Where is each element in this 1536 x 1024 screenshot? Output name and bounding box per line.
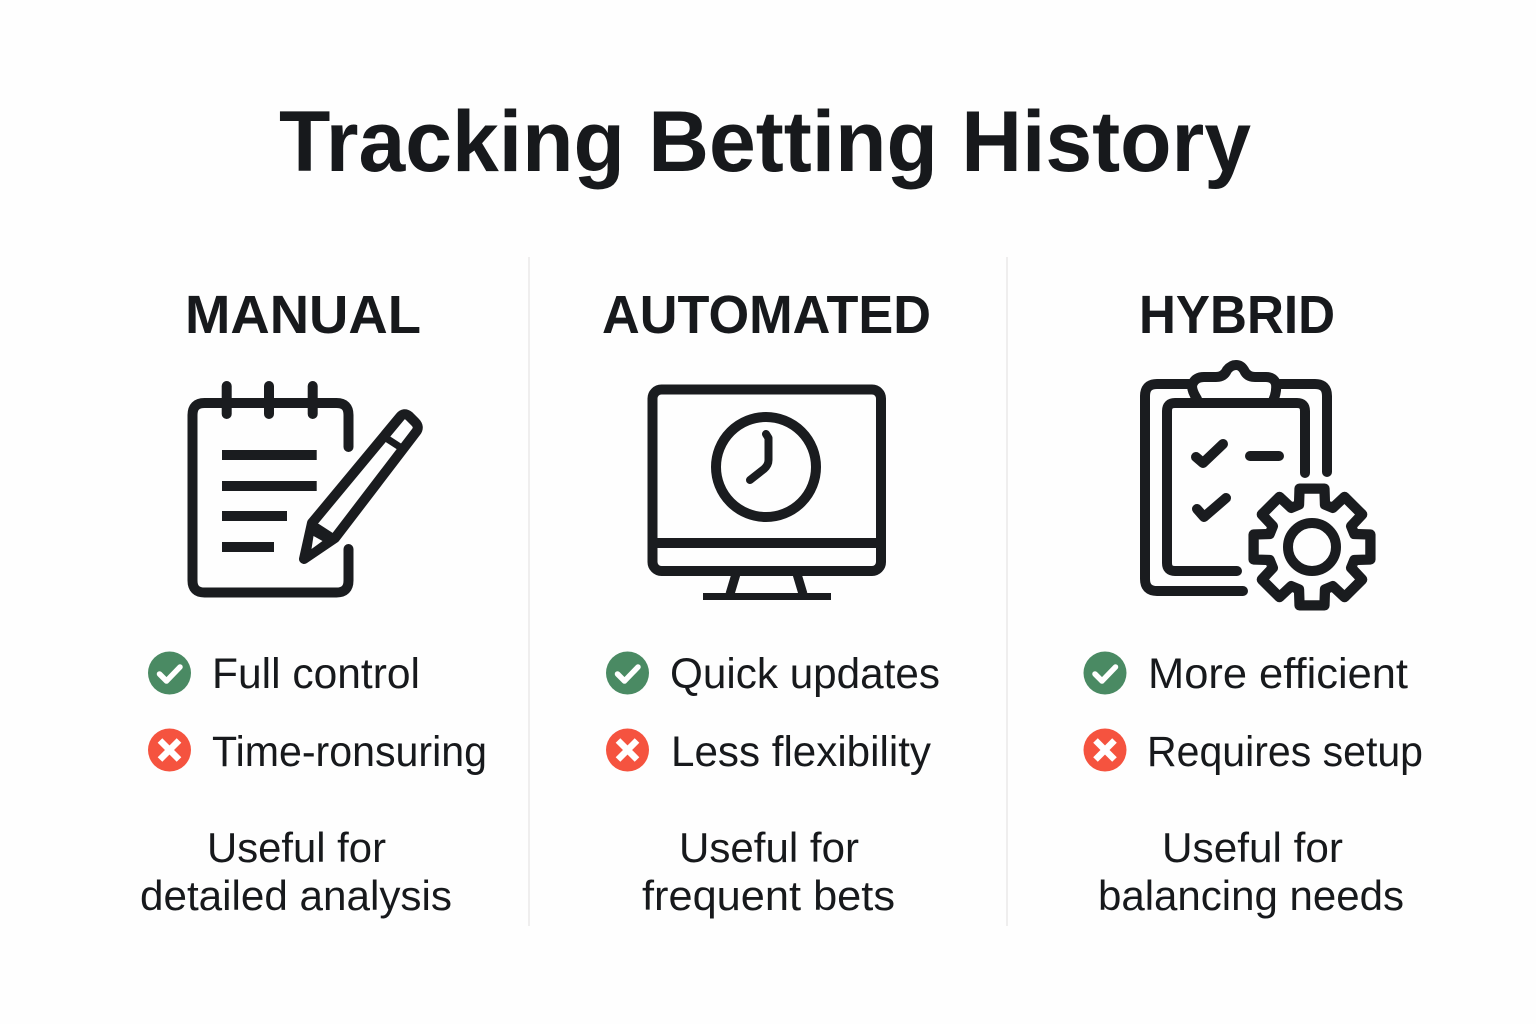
use case: hybrid: Useful for	[1162, 824, 1343, 871]
title: Tracking Betting History	[279, 94, 1251, 190]
con: time-ronsuring: Time-ronsuring	[212, 729, 487, 776]
pro: more efficient: More efficient	[1148, 651, 1408, 698]
heading: hybrid: HYBRID	[1139, 286, 1335, 345]
pro: quick updates: Quick updates	[670, 651, 940, 698]
con: less flexibility: Less flexibility	[671, 729, 932, 776]
pro: full control: Full control	[212, 651, 420, 698]
use case: hybrid	[1098, 824, 1404, 919]
use case: automated	[642, 824, 895, 919]
use case: hybrid: balancing needs	[1098, 872, 1404, 919]
use case: manual: Useful for	[207, 824, 386, 871]
panel: manual	[140, 286, 487, 919]
icon: clipboard with gear	[1145, 365, 1370, 605]
use case: automated: frequent bets	[642, 872, 895, 919]
icon: monitor with clock	[652, 390, 881, 596]
icon: notepad and pencil	[192, 386, 418, 592]
panel: hybrid	[1084, 286, 1423, 919]
panel: automated	[602, 286, 940, 919]
use case: automated: Useful for	[679, 824, 859, 871]
use case: manual: detailed analysis	[140, 872, 452, 919]
heading: automated: AUTOMATED	[602, 286, 931, 345]
con: requires setup: Requires setup	[1147, 729, 1423, 776]
use case: manual	[140, 824, 452, 919]
heading: manual: MANUAL	[185, 286, 421, 345]
